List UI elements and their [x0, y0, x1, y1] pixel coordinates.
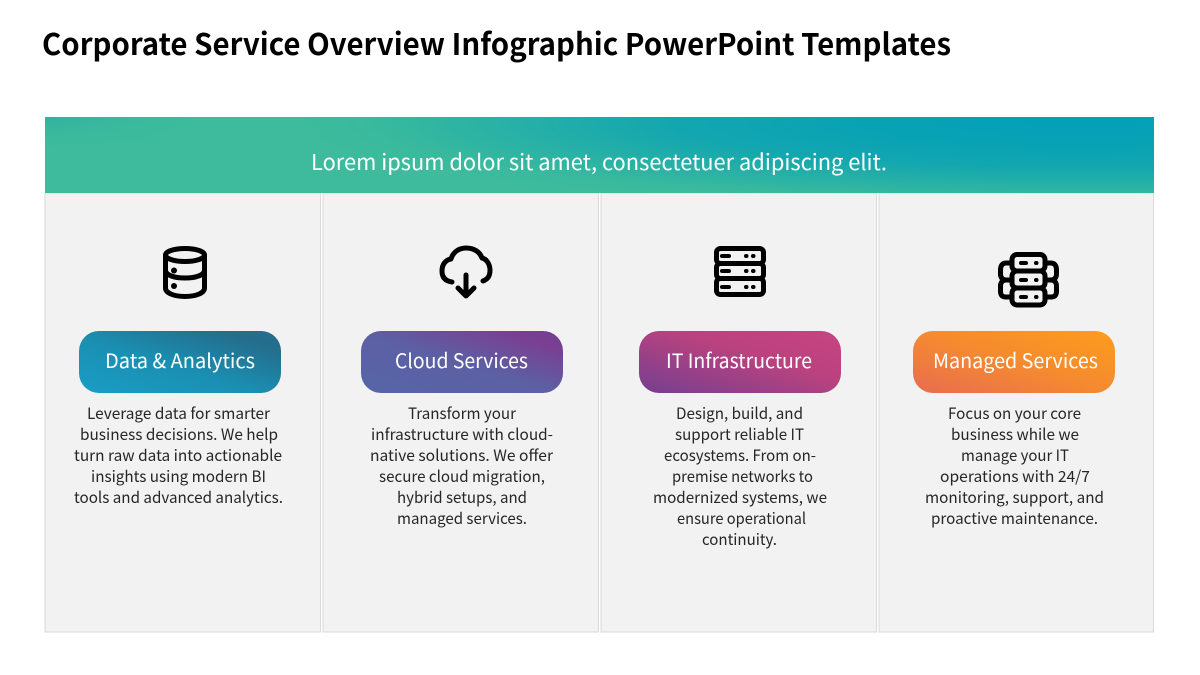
- text: Managed Services description: manage your IT: [961, 444, 1069, 466]
- pill: Managed Services: [913, 331, 1115, 393]
- text: Cloud Services description: Transform your: [408, 402, 517, 424]
- text: Data & Analytics description: turn raw data into actionable: [74, 444, 282, 466]
- icon: database: [166, 248, 204, 296]
- text: Managed Services description: [925, 402, 1104, 529]
- text: IT Infrastructure description: premise networks to: [672, 465, 813, 487]
- text: Data & Analytics description: [74, 402, 283, 508]
- text: Cloud Services description: infrastructure with cloud-: [371, 423, 553, 445]
- text: Cloud Services description: managed services.: [397, 507, 527, 529]
- pill: Cloud Services: [361, 331, 563, 393]
- text: IT Infrastructure description: [653, 402, 827, 550]
- title: Corporate Service Overview Infographic PowerPoint Templates: [42, 20, 951, 64]
- text: Managed Services description: proactive maintenance.: [931, 507, 1098, 529]
- pill: Managed Services: Managed Services: [933, 345, 1098, 374]
- text: Cloud Services description: secure cloud migration,: [379, 465, 545, 487]
- text: Managed Services description: operations with 24/7: [940, 465, 1090, 487]
- pill: IT Infrastructure: [639, 331, 841, 393]
- text: Managed Services description: monitoring, support, and: [925, 486, 1104, 508]
- text: Cloud Services description: hybrid setups, and: [397, 486, 527, 508]
- pill: IT Infrastructure: IT Infrastructure: [666, 345, 812, 374]
- pill: Cloud Services: Cloud Services: [395, 345, 528, 374]
- panel: Data & Analytics: [45, 193, 320, 632]
- text: IT Infrastructure description: ecosystems. From on-: [664, 444, 816, 466]
- banner: [45, 117, 1154, 193]
- text: Data & Analytics description: insights using modern BI: [91, 465, 266, 487]
- panel: Cloud Services: [323, 193, 598, 632]
- panel: IT Infrastructure: [601, 193, 876, 632]
- text: Cloud Services description: native solutions. We offer: [370, 444, 554, 466]
- text: Cloud Services description: [370, 402, 554, 529]
- icon: managed servers: [1000, 254, 1056, 305]
- icon: server rack: [716, 248, 764, 294]
- pill: Data & Analytics: [79, 331, 281, 393]
- text: IT Infrastructure description: ensure operational: [677, 507, 806, 529]
- text: IT Infrastructure description: Design, build, and: [676, 402, 803, 424]
- text: Managed Services description: Focus on your core: [948, 402, 1081, 424]
- text: IT Infrastructure description: support reliable IT: [675, 423, 804, 445]
- icon: cloud download: [442, 248, 490, 296]
- text: IT Infrastructure description: continuity.: [702, 528, 777, 550]
- text: Managed Services description: business while we: [951, 423, 1079, 445]
- banner text: Lorem ipsum dolor sit amet, consectetuer adipiscing elit.: [311, 145, 887, 177]
- text: Data & Analytics description: business decisions. We help: [80, 423, 278, 445]
- text: IT Infrastructure description: modernized systems, we: [653, 486, 827, 508]
- text: Data & Analytics description: Leverage data for smarter: [87, 402, 271, 424]
- pill: Data & Analytics: Data & Analytics: [105, 345, 255, 374]
- panel: Managed Services: [879, 193, 1154, 632]
- text: Data & Analytics description: tools and advanced analytics.: [74, 486, 283, 508]
